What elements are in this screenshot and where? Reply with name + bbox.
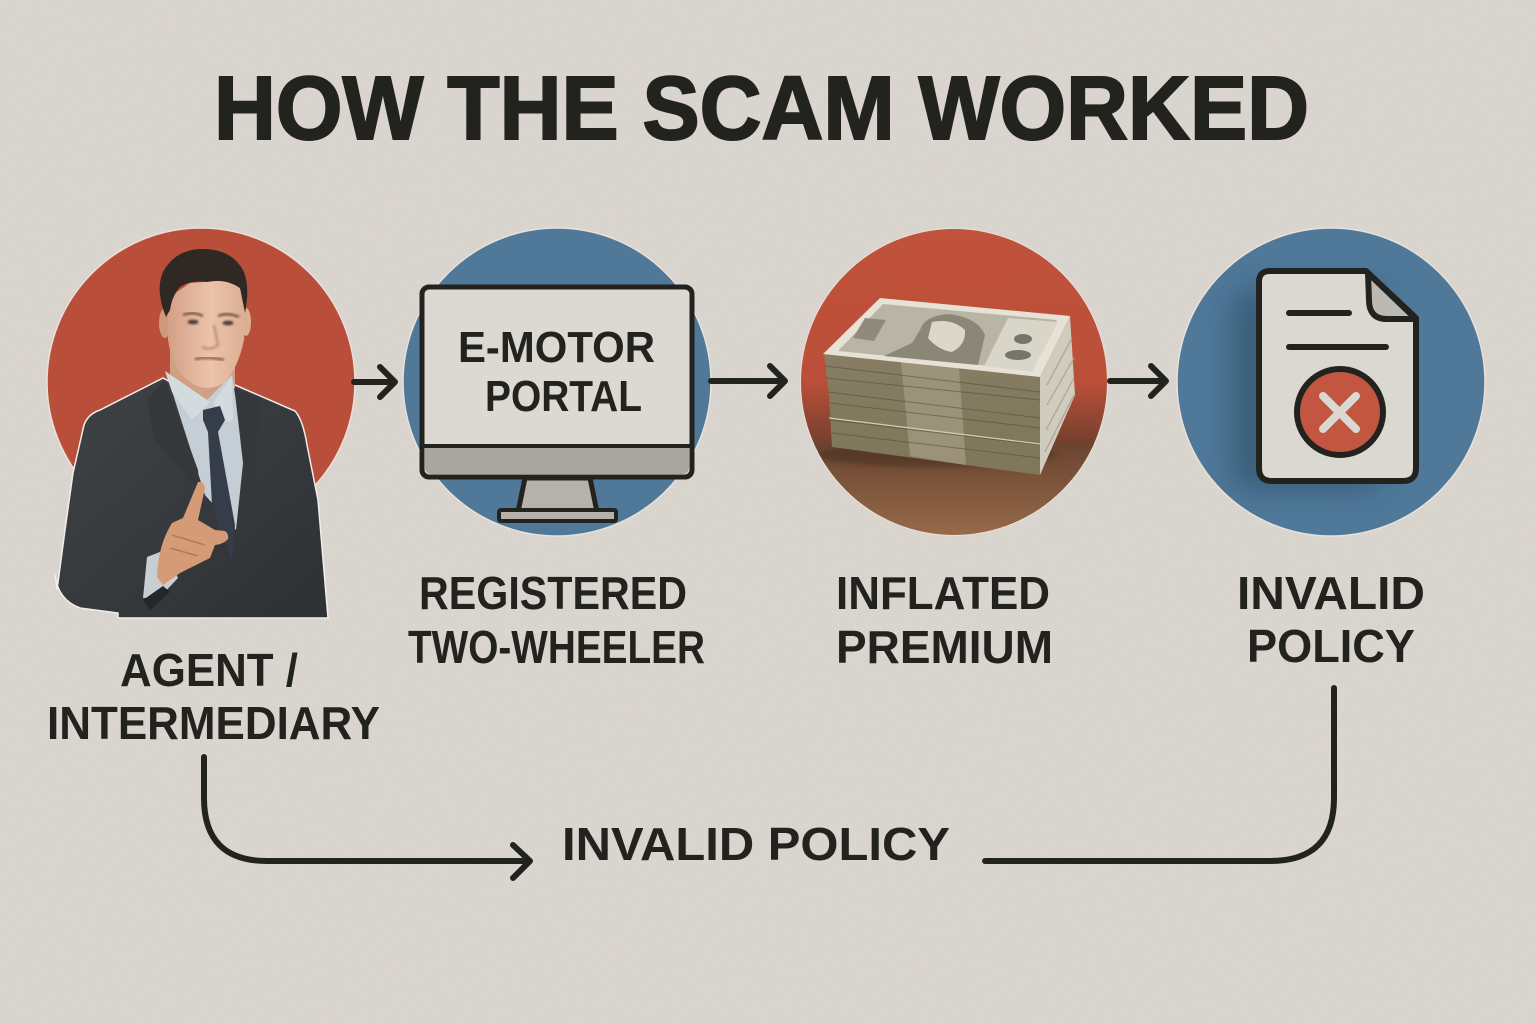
label: inflated premium [836, 567, 1053, 673]
red circle with table [800, 228, 1108, 536]
collar [165, 371, 233, 422]
title: HOW THE SCAM WORKED [214, 59, 1309, 159]
sleeve cuff [143, 550, 178, 598]
icon: monitor: PORTAL [485, 372, 642, 421]
paper band [901, 362, 966, 465]
label: agent / intermediary [47, 644, 380, 749]
nose and mouth [202, 325, 218, 349]
icon: agent in suit [55, 249, 328, 618]
screen text: E-MOTOR [458, 323, 655, 372]
label: registered two-wheeler: REGISTERED [419, 567, 687, 619]
neck [170, 350, 235, 412]
arrow: portal to premium [711, 366, 785, 396]
label: inflated premium: PREMIUM [836, 621, 1053, 673]
icon: stack of banknotes [823, 298, 1075, 475]
shirt [166, 372, 243, 530]
label: registered two-wheeler [408, 567, 705, 673]
label: agent / intermediary: AGENT / [120, 644, 298, 696]
step 2: e-motor portal [403, 228, 711, 536]
top note [823, 298, 1070, 377]
arrow: return line from invalid policy [985, 688, 1334, 861]
step 1: agent / intermediary [47, 228, 355, 618]
ear [159, 308, 171, 338]
label: registered two-wheeler: TWO-WHEELER [408, 621, 705, 673]
eyes and brows [183, 313, 239, 317]
label: agent / intermediary: INTERMEDIARY [47, 697, 380, 749]
label: bottom invalid policy: INVALID POLICY [562, 818, 950, 870]
blue circle behind monitor [403, 228, 711, 536]
lapels [147, 380, 200, 493]
arrow: agent to invalid policy loop [204, 757, 530, 878]
hand and finger [157, 482, 228, 585]
label: invalid policy: POLICY [1247, 620, 1415, 672]
label: inflated premium: INFLATED [836, 567, 1050, 619]
label: invalid policy [1237, 567, 1425, 672]
label: invalid policy: INVALID [1237, 567, 1425, 619]
icon: document with x [1259, 271, 1416, 481]
step 4: invalid policy [1177, 228, 1485, 536]
arrow: agent to portal [354, 367, 395, 397]
note portrait [884, 314, 985, 365]
arrow: premium to invalid policy [1110, 366, 1166, 396]
red circle behind agent [47, 228, 355, 536]
tie [203, 406, 235, 560]
icon: monitor [422, 287, 692, 521]
step 3: inflated premium [800, 228, 1110, 538]
face [168, 280, 246, 388]
hair [160, 249, 247, 317]
blue circle [1177, 228, 1485, 536]
